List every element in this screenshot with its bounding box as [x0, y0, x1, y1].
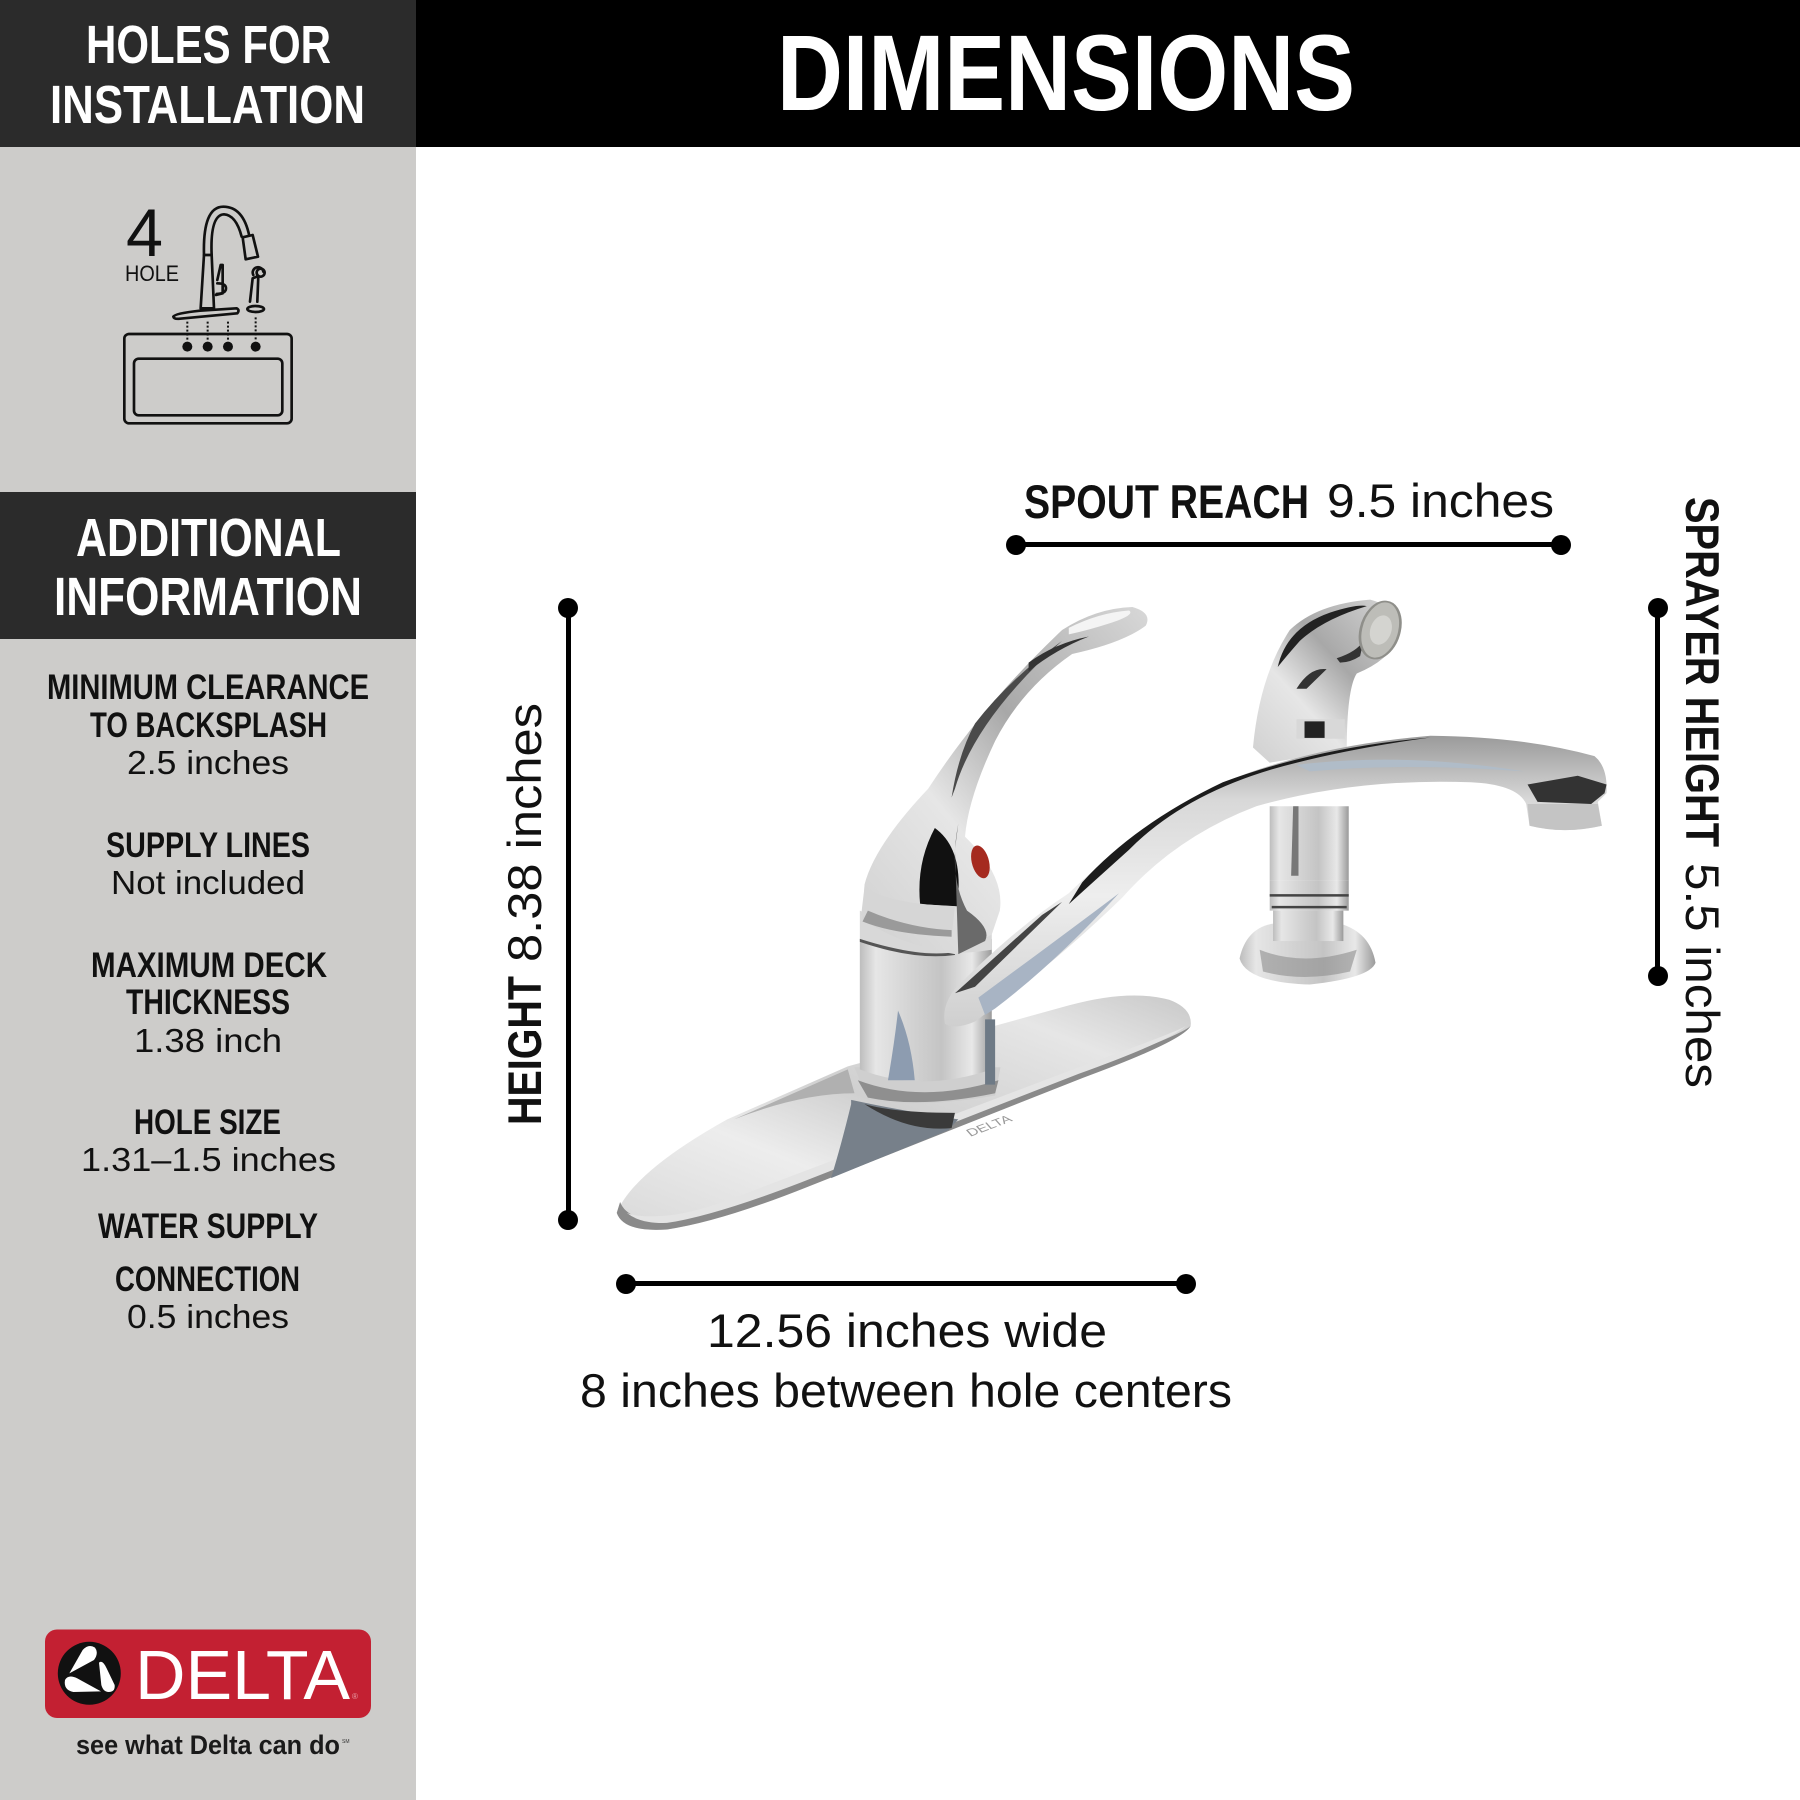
spec: maximum deck thickness: THICKNESS: [126, 983, 290, 1022]
spec: maximum deck thickness: 1.38 inch: [134, 1022, 282, 1059]
logo: delta: SM: [342, 1739, 350, 1745]
icon: 4 hole sink diagram: 4: [126, 195, 163, 271]
spec: maximum deck thickness: [91, 946, 327, 1059]
heading: holes for installation: [0, 0, 416, 147]
spec: minimum clearance: MINIMUM CLEARANCE: [47, 668, 369, 707]
logo: delta: ®: [352, 1692, 358, 1701]
spout: [944, 736, 1607, 1026]
header: dimensions: [416, 0, 1800, 147]
arrow: width dimension line: [616, 1274, 1196, 1294]
label: spout reach: [1024, 474, 1554, 528]
spec: hole size: HOLE SIZE: [134, 1103, 281, 1142]
label: sprayer height: [1676, 497, 1729, 1088]
spec: supply lines: SUPPLY LINES: [106, 826, 310, 865]
label: sprayer height: SPRAYER HEIGHT: [1676, 497, 1729, 847]
spec: maximum deck thickness: MAXIMUM DECK: [91, 946, 327, 985]
label: spout reach: SPOUT REACH: [1024, 475, 1309, 528]
sidebar panel: [0, 0, 416, 1800]
heading: additional information: ADDITIONAL: [76, 508, 341, 568]
label: height: 8.38 inches: [498, 703, 551, 962]
label: width and hole centers: [580, 1304, 1232, 1417]
label: width and hole centers: 12.56 inches wide: [707, 1304, 1107, 1357]
label: sprayer height: 5.5 inches: [1676, 863, 1729, 1088]
label: width and hole centers: 8 inches between hole centers: [580, 1364, 1232, 1417]
icon: red hot indicator: [968, 845, 993, 879]
spec: water supply connection: WATER SUPPLY: [98, 1207, 318, 1246]
spec: supply lines: Not included: [111, 864, 305, 901]
arrow: sprayer height dimension line: [1648, 598, 1668, 986]
spec: water supply connection: 0.5 inches: [127, 1298, 289, 1335]
spec: minimum clearance: 2.5 inches: [127, 744, 289, 781]
heading: additional information: INFORMATION: [54, 567, 362, 627]
spec: supply lines: [106, 826, 310, 901]
label: spout reach: 9.5 inches: [1327, 474, 1554, 527]
base plate: DELTA: [963, 1112, 1016, 1139]
base plate: [617, 995, 1191, 1230]
lever handle: [861, 607, 1147, 954]
arrow: height dimension line: [558, 598, 578, 1230]
heading: holes for installation: HOLES FOR: [86, 15, 331, 75]
sprayer: [1240, 600, 1406, 985]
spec: minimum clearance: [47, 668, 369, 781]
spec: hole size: [81, 1103, 336, 1178]
label: height: [498, 703, 551, 1125]
spec: water supply connection: [98, 1207, 318, 1335]
logo: delta: [45, 1630, 371, 1760]
spec: minimum clearance: TO BACKSPLASH: [90, 706, 327, 745]
heading: holes for installation: INSTALLATION: [50, 75, 365, 135]
spec: hole size: 1.31–1.5 inches: [81, 1141, 336, 1178]
logo: delta: DELTA: [135, 1636, 350, 1714]
faucet illustration: [617, 600, 1607, 1230]
label: height: HEIGHT: [498, 976, 551, 1125]
spec: water supply connection: CONNECTION: [115, 1260, 300, 1299]
faucet body: [854, 911, 1000, 1103]
heading: additional information: [0, 492, 416, 639]
logo: delta: see what Delta can do: [76, 1730, 340, 1760]
icon: 4 hole sink diagram: [124, 195, 292, 423]
header: dimensions: DIMENSIONS: [777, 12, 1355, 133]
icon: 4 hole sink diagram: HOLE: [125, 261, 179, 286]
arrow: spout reach dimension line: [1006, 535, 1571, 555]
